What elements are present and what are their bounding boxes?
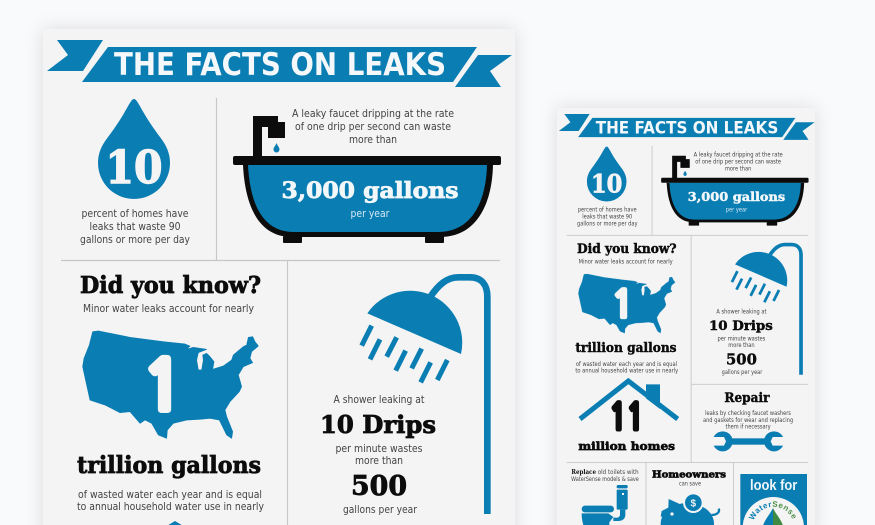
panel: ten percent of homes: percent of homes have: [82, 208, 188, 220]
panel: leaky faucet bathtub: [233, 108, 501, 243]
panel: leaky faucet bathtub: of one drip per second can waste: [295, 121, 451, 133]
WaterSense badge: WaterSense: [748, 501, 796, 520]
small panel: did you know: to annual household water use in nearly: [575, 369, 679, 375]
small panel: leaking shower: A shower leaking at: [716, 310, 767, 316]
small poster card: [552, 102, 820, 525]
panel: ten percent of homes: 10: [106, 141, 162, 194]
small panel: leaky faucet bathtub: A leaky faucet dripping at the rate: [694, 152, 783, 158]
small panel: did you know: 1: [611, 286, 634, 323]
small panel: leaking shower: 10 Drips: [709, 319, 773, 334]
panel: leaky faucet bathtub: 3,000 gallons: [282, 178, 458, 204]
title banner: [47, 40, 512, 87]
small panel: leaky faucet bathtub: more than: [725, 167, 752, 173]
small panel: replace old toilets: Replace old toilets with: [571, 469, 639, 476]
panel: leaking shower: 10 Drips: [320, 410, 436, 439]
small panel: replace old toilets: [571, 469, 639, 525]
icon: house roof: [580, 381, 678, 419]
small panel: eleven million homes: [578, 381, 678, 453]
small title banner: THE FACTS ON LEAKS: [596, 118, 778, 138]
small panel: leaking shower: per minute wastes: [718, 337, 765, 343]
panel: did you know: trillion gallons: [77, 452, 261, 479]
icon: shower head: [362, 277, 487, 514]
small panel: ten percent of homes: percent of homes have: [578, 207, 637, 213]
panel: leaky faucet bathtub: A leaky faucet dripping at the rate: [292, 108, 454, 120]
title banner: THE FACTS ON LEAKS: [114, 47, 446, 83]
map of the United States: [83, 331, 258, 438]
panel: leaking shower: per minute wastes: [336, 443, 422, 455]
panel: leaky faucet bathtub: more than: [349, 134, 397, 146]
icon: toilet: [582, 485, 628, 525]
panel: did you know: 1: [142, 354, 184, 421]
small panel: look for WaterSense: look for: [750, 478, 798, 494]
small panel: leaky faucet bathtub: [661, 152, 809, 226]
small panel: leaking shower: [709, 245, 801, 376]
panel: leaking shower: gallons per year: [343, 504, 418, 516]
small panel: leaking shower: more than: [728, 343, 755, 349]
small panel: homeowners can save: [652, 469, 727, 525]
panel: leaky faucet bathtub: per year: [350, 208, 390, 220]
small panel: repair: them if necessary: [726, 425, 771, 431]
small panel: homeowners can save: can save: [679, 481, 701, 488]
small panel: leaking shower: 500: [726, 350, 757, 368]
small panel: eleven million homes: million homes: [578, 439, 675, 453]
panel: leaking shower: more than: [355, 455, 403, 467]
small panel: homeowners can save: Homeowners: [652, 469, 727, 480]
large poster card: [43, 29, 515, 525]
panel: leaking shower: 500: [351, 471, 407, 502]
small panel: repair: Repair: [724, 391, 770, 406]
icon: wrench: [711, 431, 785, 451]
panel: ten percent of homes: gallons or more per day: [80, 234, 190, 246]
panel: ten percent of homes: leaks that waste 90: [90, 221, 180, 233]
small panel: leaky faucet bathtub: of one drip per second can waste: [695, 160, 781, 166]
house roof tip: [165, 521, 185, 525]
small panel: leaky faucet bathtub: 3,000 gallons: [688, 190, 785, 204]
small title banner: [559, 114, 815, 140]
small panel: did you know: [575, 241, 679, 374]
small panel: did you know: Minor water leaks account for nearly: [579, 260, 673, 266]
panel: did you know: of wasted water each year and is equal: [78, 489, 262, 501]
panel: did you know: [77, 272, 264, 525]
small panel: ten percent of homes: [577, 146, 638, 228]
small panel: did you know: trillion gallons: [575, 340, 677, 355]
panel: did you know: to annual household water use in nearly: [77, 501, 264, 513]
small panel: did you know: of wasted water each year and is equal: [576, 362, 677, 368]
small panel: replace old toilets: WaterSense models & save: [571, 476, 639, 483]
panel: ten percent of homes: [80, 99, 190, 246]
panel: leaking shower: [320, 277, 487, 516]
small panel: ten percent of homes: gallons or more per day: [577, 222, 638, 228]
small panel: repair: leaks by checking faucet washers: [705, 411, 791, 417]
small panel: repair: [703, 391, 793, 431]
small panel: leaking shower: gallons per year: [722, 370, 763, 376]
icon: piggy bank: $: [691, 498, 697, 509]
small panel: ten percent of homes: 10: [591, 170, 622, 199]
small panel: leaky faucet bathtub: per year: [726, 207, 748, 213]
panel: did you know: Minor water leaks account for nearly: [83, 303, 254, 315]
small panel: ten percent of homes: leaks that waste 90: [582, 214, 633, 220]
small panel: repair: and gaskets for wear and replacing: [703, 418, 793, 424]
panel: did you know: Did you know?: [80, 272, 261, 299]
small panel: did you know: Did you know?: [577, 241, 677, 256]
panel: leaking shower: A shower leaking at: [334, 394, 424, 406]
small panel: eleven million homes: 11: [609, 400, 644, 435]
small panel: look for WaterSense: [740, 474, 807, 525]
small icon: shower head: [732, 245, 801, 375]
small map of the United States: [578, 274, 675, 333]
